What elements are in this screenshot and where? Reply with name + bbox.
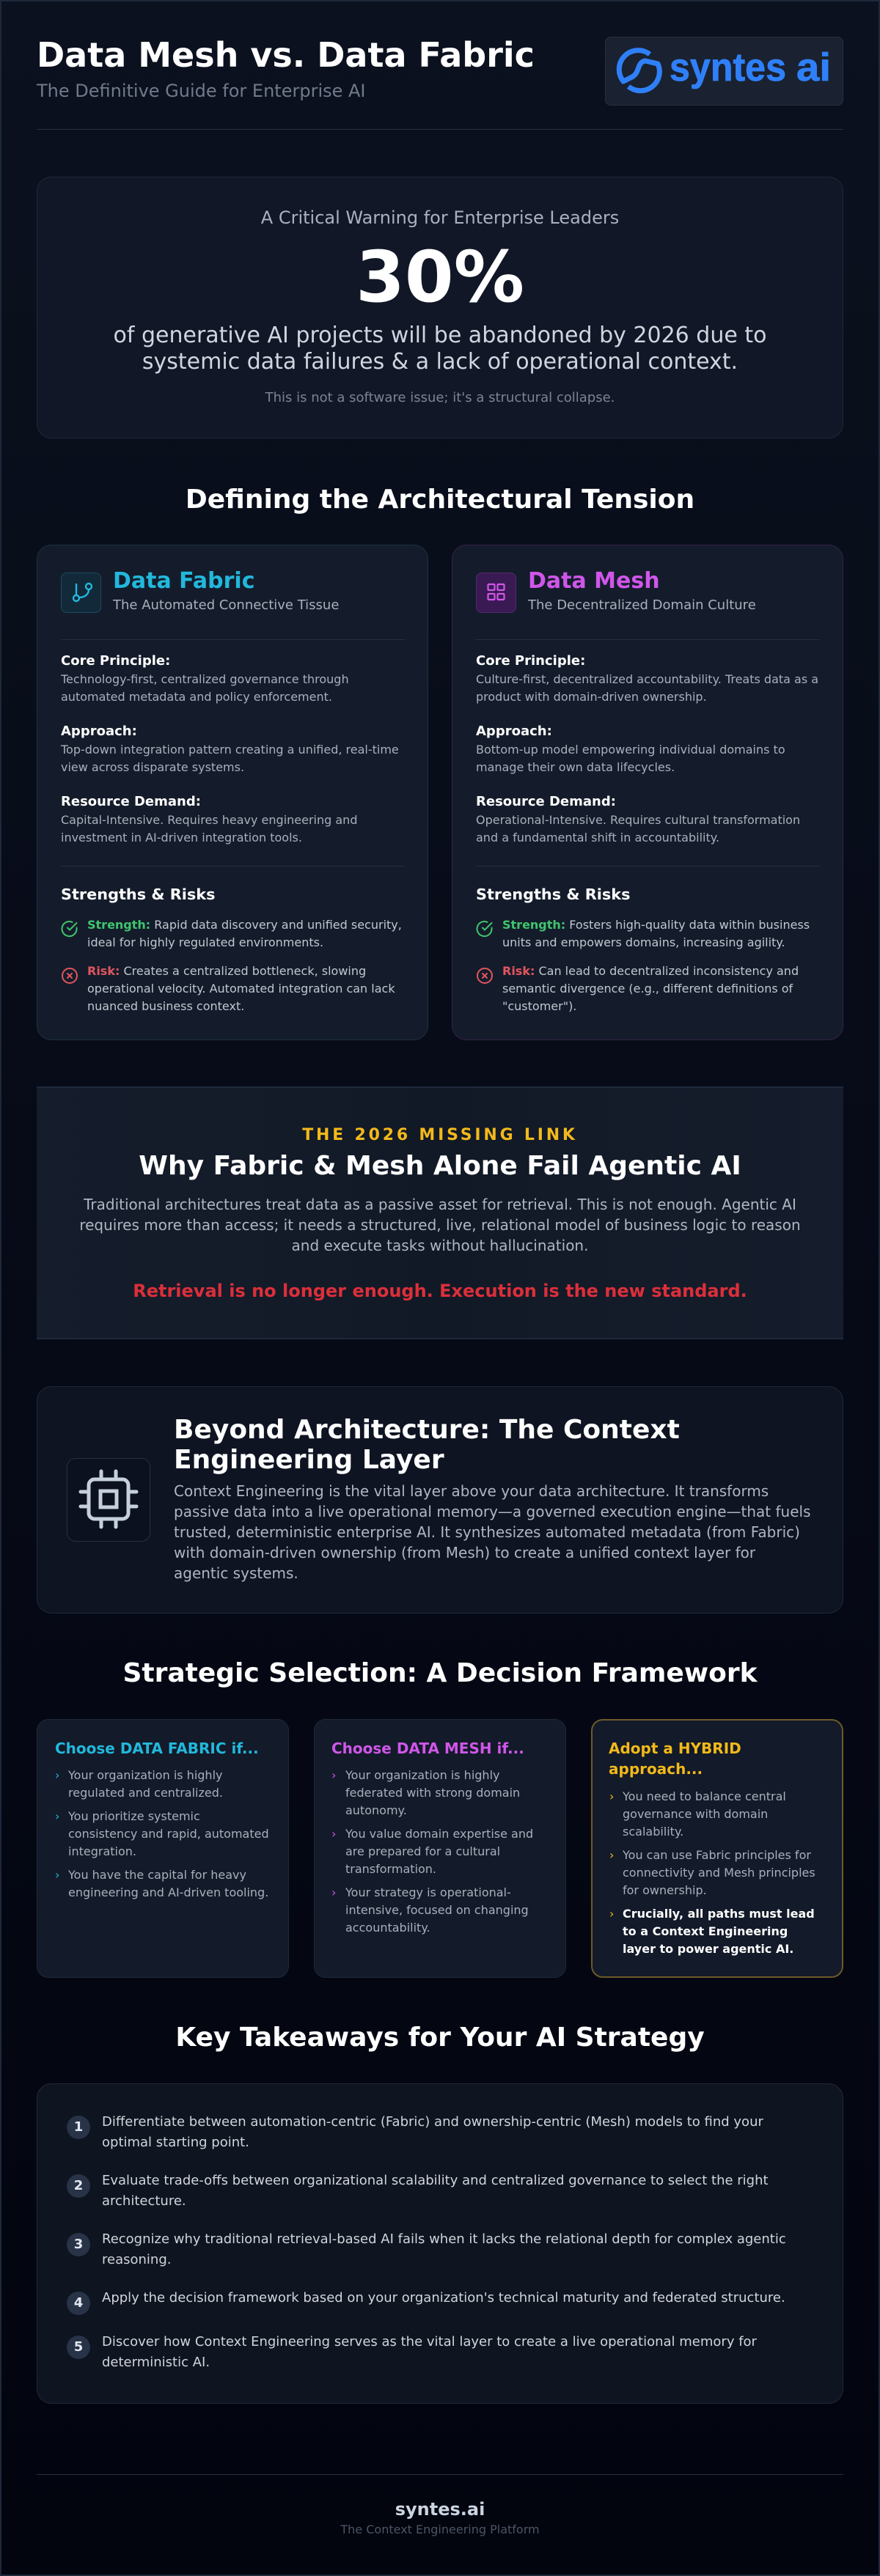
missing link paragraph [79, 1196, 801, 1254]
fabric title: Data Fabric [113, 568, 255, 594]
context paragraph [174, 1482, 811, 1582]
context paragraph: Context Engineering is the vital layer above your data architecture. It transforms [174, 1482, 769, 1500]
missing link heading: Why Fabric & Mesh Alone Fail Agentic AI [139, 1151, 741, 1181]
warning statement: of generative AI projects will be abandoned by 2026 due to [114, 323, 766, 348]
takeaway 5: 5 [74, 2339, 83, 2355]
panel: choose mesh [314, 1719, 566, 1978]
mesh resource demand: and a fundamental shift in accountability. [476, 831, 719, 844]
fabric choice title: Choose DATA FABRIC if... [55, 1740, 259, 1757]
panel: missing link [37, 1086, 843, 1339]
takeaway 1: 1 [74, 2119, 83, 2135]
hybrid list: scalability. [623, 1825, 683, 1839]
fabric choice list: integration. [68, 1844, 136, 1858]
panel: takeaways [37, 2083, 843, 2404]
fabric subtitle: The Automated Connective Tissue [113, 597, 339, 613]
missing link paragraph: and execute tasks without hallucination. [292, 1237, 588, 1254]
mesh strength: Strength: Fosters high-quality data within business [502, 918, 810, 932]
hybrid list: Crucially, all paths must lead [623, 1907, 815, 1921]
mesh resource demand: Resource Demand: [476, 794, 616, 809]
takeaway 2: 2 [74, 2178, 83, 2193]
missing link callout: Retrieval is no longer enough. Execution is the new standard. [133, 1281, 747, 1301]
takeaway 4: 4 [74, 2295, 83, 2311]
fabric choice list: regulated and centralized. [68, 1786, 223, 1800]
panel: data fabric [37, 545, 428, 1040]
mesh choice list: Your strategy is operational- [345, 1885, 511, 1899]
panel: data mesh [452, 545, 843, 1040]
icon: check [477, 921, 493, 937]
takeaway 2: architecture. [102, 2193, 186, 2209]
fabric core principle: automated metadata and policy enforcement. [61, 690, 332, 704]
fabric strengths heading: Strengths & Risks [61, 886, 215, 903]
takeaway 3: reasoning. [102, 2252, 171, 2267]
fabric approach [60, 724, 399, 774]
takeaway 2 [67, 2173, 769, 2209]
mesh choice title: Choose DATA MESH if... [331, 1740, 524, 1757]
context heading: Beyond Architecture: The Context [174, 1415, 680, 1445]
missing link kicker: THE 2026 MISSING LINK [302, 1126, 578, 1144]
takeaway 3: Recognize why traditional retrieval-based AI fails when it lacks the relational depth for complex agentic [102, 2231, 786, 2247]
hybrid list: to a Context Engineering [623, 1924, 788, 1938]
logo: syntes ai: syntes [670, 45, 786, 89]
mesh choice list: Your organization is highly [345, 1768, 499, 1782]
mesh choice list: intensive, focused on changing [345, 1903, 529, 1917]
mesh core principle: product with domain-driven ownership. [476, 690, 707, 704]
fabric strength: ideal for highly regulated environments. [87, 935, 323, 949]
stat: 30%: 30% [356, 236, 524, 318]
hybrid list: › [609, 1789, 614, 1803]
mesh choice list: are prepared for a cultural [345, 1844, 500, 1858]
context paragraph: trusted, deterministic enterprise AI. It synthesizes automated metadata (from Fabric) [174, 1523, 800, 1541]
mesh approach: manage their own data lifecycles. [476, 760, 675, 774]
hybrid list: › [609, 1848, 614, 1862]
mesh resource demand: Operational-Intensive. Requires cultural transformation [476, 813, 800, 827]
title: Data Mesh vs. Data Fabric [37, 35, 535, 75]
missing link paragraph: Traditional architectures treat data as a passive asset for retrieval. This is not enough. Agentic AI [84, 1196, 796, 1213]
mesh choice list [331, 1768, 533, 1935]
logo: syntes ai: ai [796, 45, 831, 89]
fabric approach: view across disparate systems. [61, 760, 244, 774]
panel: choose fabric [37, 1719, 289, 1978]
hybrid list [609, 1789, 815, 1956]
hybrid list: You need to balance central [623, 1789, 786, 1803]
fabric approach: Top-down integration pattern creating a unified, real-time [61, 743, 399, 757]
icon: check [62, 921, 78, 937]
heading: key takeaways: Key Takeaways for Your AI Strategy [175, 2023, 705, 2053]
warning statement: systemic data failures & a lack of operational context. [142, 349, 738, 375]
hybrid title: Adopt a HYBRID [609, 1740, 741, 1757]
panel: context engineering [37, 1386, 843, 1613]
fabric resource demand [61, 794, 357, 844]
mesh risk [502, 964, 799, 1013]
hybrid list: You can use Fabric principles for [623, 1848, 811, 1862]
fabric risk: operational velocity. Automated integration can lack [87, 982, 395, 996]
mesh strength [502, 918, 810, 949]
icon: cross [477, 968, 493, 984]
mesh choice list: federated with strong domain [345, 1786, 520, 1800]
hybrid title [609, 1740, 741, 1778]
context paragraph: passive data into a live operational memory—a governed execution engine—that fuels [174, 1503, 811, 1520]
hybrid list: connectivity and Mesh principles [623, 1866, 815, 1880]
mesh risk: "customer"). [502, 999, 576, 1013]
fabric strength [87, 918, 402, 949]
fabric choice list: › [55, 1868, 59, 1882]
hybrid list: governance with domain [623, 1807, 768, 1821]
mesh choice list: › [331, 1885, 336, 1899]
mesh risk: Risk: Can lead to decentralized inconsistency and [502, 964, 799, 978]
logo: syntes ai [605, 37, 843, 106]
heading: decision framework: Strategic Selection: A Decision Framework [122, 1658, 758, 1688]
fabric choice list: consistency and rapid, automated [68, 1827, 269, 1841]
fabric risk: Risk: Creates a centralized bottleneck, slowing [87, 964, 366, 978]
fabric resource demand: Resource Demand: [61, 794, 201, 809]
fabric choice list: › [55, 1768, 59, 1782]
hybrid list: › [609, 1907, 614, 1921]
fabric choice list: You have the capital for heavy [68, 1868, 246, 1882]
mesh choice list: › [331, 1768, 336, 1782]
warning statement [114, 323, 766, 375]
footer brand: syntes.ai [395, 2499, 485, 2520]
fabric resource demand: Capital-Intensive. Requires heavy engineering and [61, 813, 357, 827]
takeaway 1: optimal starting point. [102, 2135, 249, 2150]
fabric choice list: You prioritize systemic [68, 1809, 200, 1823]
context heading: Engineering Layer [174, 1445, 444, 1475]
icon: fabric branch [61, 573, 101, 613]
hybrid list: layer to power agentic AI. [623, 1942, 793, 1956]
mesh core principle: Core Principle: [476, 653, 585, 669]
fabric core principle: Core Principle: [61, 653, 170, 669]
missing link paragraph: requires more than access; it needs a structured, live, relational model of business logic to reason [79, 1216, 801, 1234]
mesh title: Data Mesh [528, 568, 660, 594]
hybrid list: for ownership. [623, 1883, 707, 1897]
panel: hybrid [591, 1719, 843, 1978]
mesh choice list: transformation. [345, 1862, 436, 1876]
mesh core principle [476, 653, 818, 704]
takeaway 2: Evaluate trade-offs between organizational scalability and centralized governance to select the right [102, 2173, 769, 2188]
fabric choice list: engineering and AI-driven tooling. [68, 1885, 268, 1899]
takeaway 4: Apply the decision framework based on your organization's technical maturity and federated structure. [102, 2290, 785, 2305]
mesh strengths heading: Strengths & Risks [476, 886, 630, 903]
takeaway 5 [67, 2334, 757, 2370]
mesh subtitle: The Decentralized Domain Culture [528, 597, 756, 613]
mesh choice list: You value domain expertise and [345, 1827, 533, 1841]
mesh choice list: autonomy. [345, 1803, 407, 1817]
context heading [174, 1415, 680, 1475]
panel: warning [37, 177, 843, 438]
takeaway 3 [67, 2231, 786, 2267]
hybrid title: approach... [609, 1760, 703, 1778]
fabric core principle: Technology-first, centralized governance through [61, 672, 349, 686]
takeaway 1 [67, 2114, 763, 2150]
icon: chip [67, 1458, 150, 1542]
context paragraph: with domain-driven ownership (from Mesh) to create a unified context layer for [174, 1544, 755, 1561]
heading: architectural tension: Defining the Architectural Tension [186, 485, 694, 515]
mesh choice list: accountability. [345, 1921, 430, 1935]
icon: mesh grid [476, 573, 516, 613]
mesh risk: semantic divergence (e.g., different definitions of [502, 982, 793, 996]
fabric strength: Strength: Rapid data discovery and unified security, [87, 918, 402, 932]
mesh strength: units and empowers domains, increasing agility. [502, 935, 785, 949]
footer tagline: The Context Engineering Platform [340, 2522, 540, 2536]
takeaway 5: Discover how Context Engineering serves as the vital layer to create a live operational memory for [102, 2334, 757, 2349]
takeaway 5: deterministic AI. [102, 2355, 210, 2370]
subtitle: The Definitive Guide for Enterprise AI [37, 81, 365, 101]
fabric core principle [60, 653, 349, 704]
fabric choice list: › [55, 1809, 59, 1823]
fabric choice list [55, 1768, 269, 1899]
fabric risk [87, 964, 395, 1013]
mesh approach: Bottom-up model empowering individual domains to [476, 743, 785, 757]
mesh choice list: › [331, 1827, 336, 1841]
fabric choice list: Your organization is highly [68, 1768, 222, 1782]
context paragraph: agentic systems. [174, 1564, 298, 1582]
fabric approach: Approach: [61, 724, 137, 739]
takeaway 3: 3 [74, 2237, 83, 2252]
mesh core principle: Culture-first, decentralized accountability. Treats data as a [476, 672, 818, 686]
mesh approach [476, 724, 785, 774]
fabric risk: nuanced business context. [87, 999, 244, 1013]
icon: cross [62, 968, 78, 984]
fabric resource demand: investment in AI-driven integration tools. [61, 831, 302, 844]
mesh resource demand [476, 794, 800, 844]
mesh approach: Approach: [476, 724, 552, 739]
warning footnote: This is not a software issue; it's a structural collapse. [265, 390, 615, 405]
warning kicker: A Critical Warning for Enterprise Leaders [261, 207, 619, 228]
takeaway 4 [67, 2290, 785, 2315]
takeaway 1: Differentiate between automation-centric (Fabric) and ownership-centric (Mesh) models to find your [102, 2114, 763, 2130]
